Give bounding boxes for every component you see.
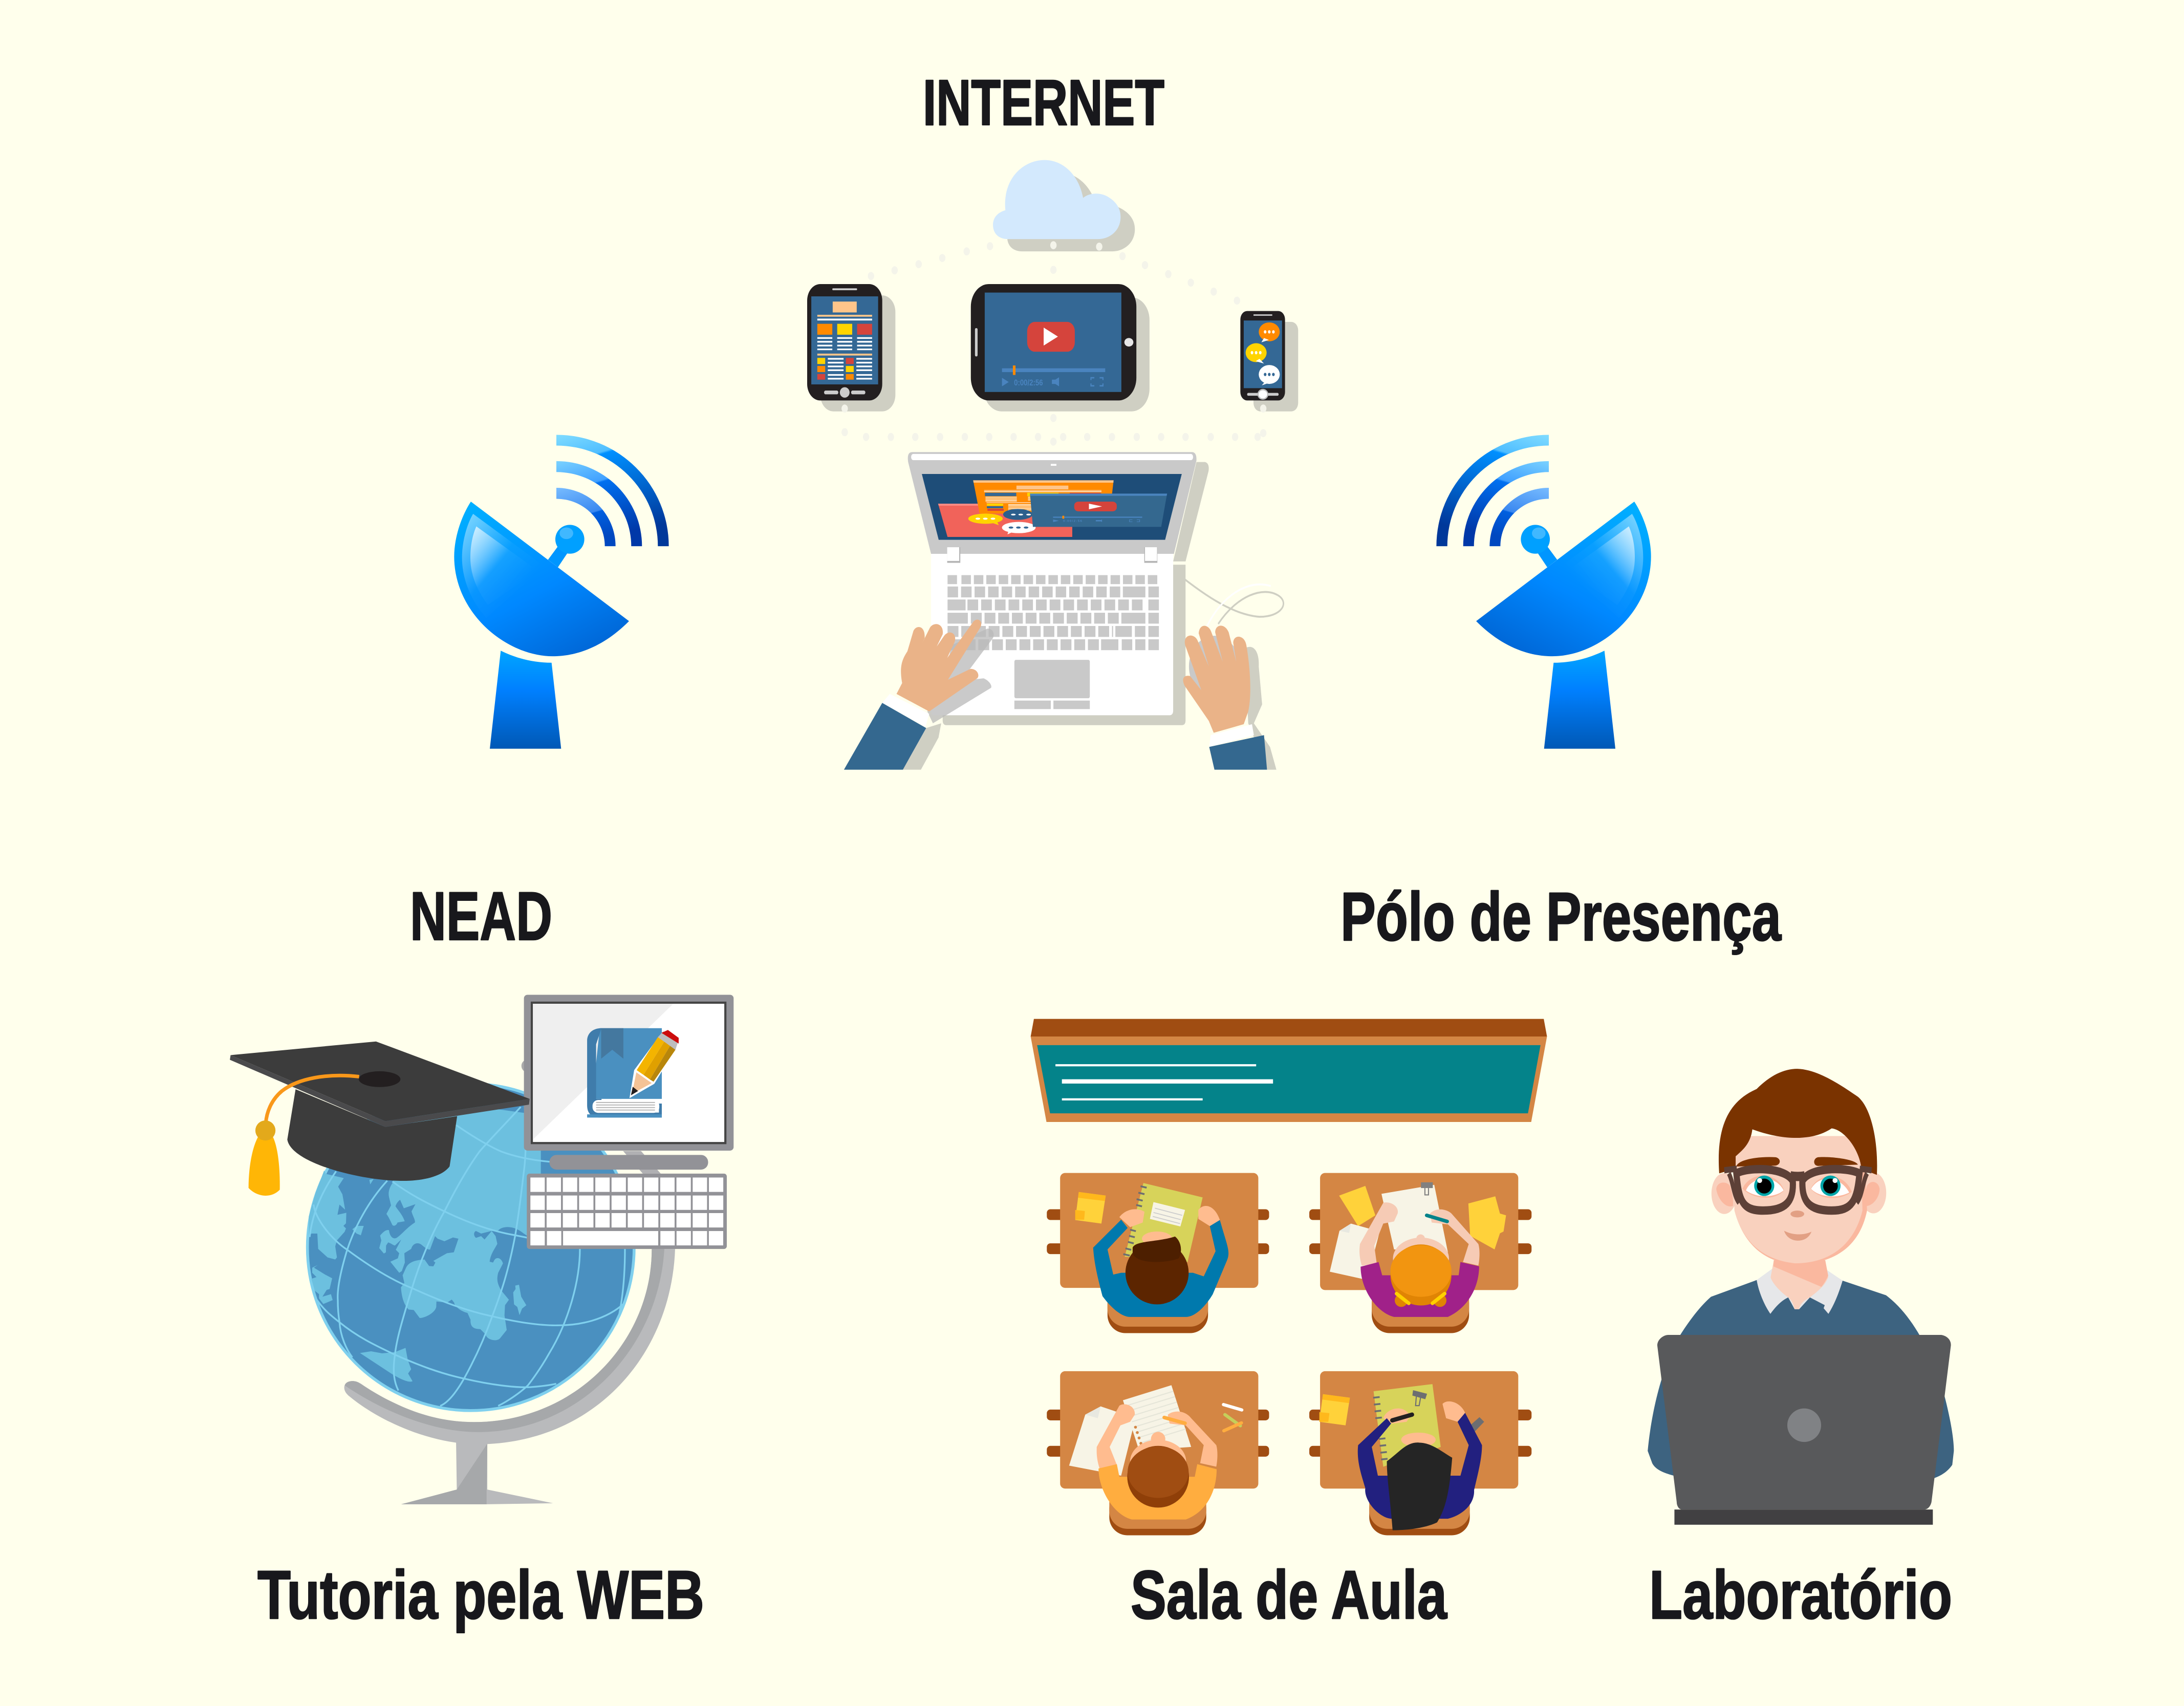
icon: video tablet bbox=[971, 284, 1150, 412]
dish pedestal bbox=[490, 651, 561, 749]
signal waves bbox=[1436, 435, 1549, 546]
dish inner highlight bbox=[1568, 526, 1635, 605]
icon: left satellite dish bbox=[454, 435, 669, 749]
label: Sala de Aula: Sala de Aula bbox=[1131, 1557, 1447, 1633]
cable bbox=[1173, 570, 1284, 624]
desk pegs bbox=[1047, 1209, 1531, 1457]
keyboard bbox=[527, 1174, 727, 1249]
graduation cap bbox=[230, 1042, 530, 1196]
student 4: navy shirt with long black hair bbox=[1320, 1371, 1518, 1535]
left hand bbox=[897, 619, 981, 711]
icon: video tablet: 0:00/2:56 bbox=[1014, 378, 1043, 387]
laboratory illustration: student with laptop bbox=[1648, 1069, 1954, 1525]
heading: INTERNET: INTERNET bbox=[923, 67, 1164, 139]
label: Tutoria pela WEB: Tutoria pela WEB bbox=[257, 1557, 704, 1633]
dish highlight bbox=[1561, 514, 1643, 618]
icon: laptop with hands bbox=[844, 452, 1284, 770]
left sleeve bbox=[903, 723, 941, 770]
classroom illustration bbox=[1031, 1019, 1547, 1535]
shirt collar bbox=[1757, 1268, 1843, 1314]
laptop back bbox=[1657, 1335, 1951, 1509]
student 3: orange shirt bbox=[1060, 1371, 1258, 1535]
heading: Pólo de Presença: Pólo de Presença bbox=[1340, 879, 1782, 955]
eyes bbox=[1742, 1176, 1852, 1198]
dish feed bbox=[548, 525, 585, 567]
student 2: magenta shirt bbox=[1320, 1173, 1518, 1333]
monitor bbox=[522, 995, 733, 1170]
laptop logo bbox=[1787, 1409, 1821, 1442]
continents and grid bbox=[309, 1098, 625, 1406]
sweater bbox=[1648, 1280, 1954, 1479]
face bbox=[1734, 1136, 1867, 1264]
chalkboard bbox=[1031, 1019, 1547, 1122]
dish highlight bbox=[462, 514, 544, 618]
hair bbox=[1719, 1069, 1877, 1175]
NEAD illustration: globe, cap and computer bbox=[230, 995, 733, 1504]
laptop base bbox=[1674, 1509, 1933, 1525]
globe bbox=[308, 1084, 634, 1411]
mouth bbox=[1784, 1230, 1811, 1241]
dish bbox=[454, 502, 629, 656]
laptop screen content: 0:00/2:56 bbox=[1063, 520, 1083, 523]
dish inner highlight bbox=[470, 526, 537, 605]
right sleeve bbox=[1209, 724, 1254, 747]
dotted connections bbox=[845, 245, 1263, 442]
ears bbox=[1712, 1173, 1886, 1214]
neck bbox=[1770, 1260, 1828, 1309]
glasses bbox=[1724, 1169, 1872, 1211]
internet devices illustration bbox=[807, 160, 1298, 770]
dish feed bbox=[1521, 525, 1557, 567]
laptop shadow bbox=[1173, 462, 1209, 562]
icon: right satellite dish bbox=[1436, 435, 1651, 749]
label: Laboratório: Laboratório bbox=[1649, 1557, 1952, 1633]
icon: phone with chat bubbles bbox=[1240, 311, 1298, 412]
heading: NEAD: NEAD bbox=[410, 878, 552, 955]
neck shadow bbox=[1774, 1260, 1828, 1287]
laptop screen content bbox=[922, 474, 1182, 540]
trackpad bbox=[1014, 660, 1090, 698]
pencil icon bbox=[630, 1029, 680, 1098]
computer monitor stand bbox=[623, 1151, 661, 1174]
keyboard bbox=[947, 579, 1159, 645]
icon: cloud bbox=[993, 160, 1135, 251]
icon: left tablet bbox=[807, 284, 895, 412]
student 1: blue shirt bbox=[1060, 1173, 1258, 1333]
laptop base bbox=[931, 554, 1173, 715]
left hand shadow bbox=[927, 629, 993, 723]
book icon bbox=[587, 1028, 662, 1117]
mouse and right hand shadow bbox=[1189, 636, 1240, 697]
dish bbox=[1476, 502, 1651, 656]
globe stand bbox=[344, 1249, 675, 1504]
laptop lid bbox=[908, 452, 1197, 554]
dish pedestal bbox=[1544, 651, 1615, 749]
eyebrows bbox=[1736, 1157, 1858, 1167]
nose bbox=[1790, 1211, 1804, 1217]
signal waves bbox=[556, 435, 669, 546]
right hand bbox=[1183, 625, 1250, 733]
